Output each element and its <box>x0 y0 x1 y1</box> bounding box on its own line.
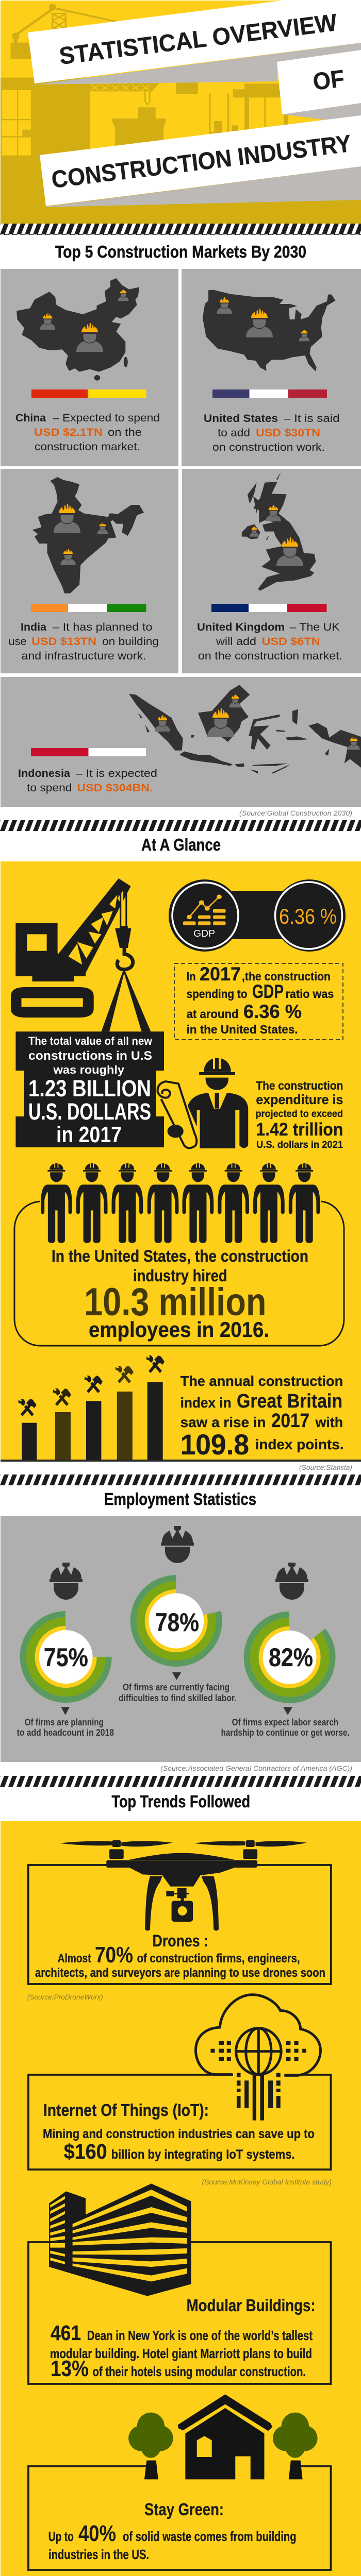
text: modular buildings <box>50 2296 316 2381</box>
text: china: USD $2.1TN <box>34 427 103 438</box>
text: employees hired: In the United States, the construction <box>52 1247 308 1265</box>
text: stay green <box>48 2500 297 2562</box>
panel: india <box>1 469 178 673</box>
icons: row of workers <box>41 1163 320 1243</box>
construction skyline <box>1 4 361 224</box>
text: india: India <box>21 621 46 633</box>
icon: drone <box>60 1840 307 1930</box>
text: united kingdom: United Kingdom <box>197 621 285 633</box>
icon: gdp chart <box>183 894 226 925</box>
donut: 82 percent <box>247 1615 333 1700</box>
donut: 78 percent: 78% <box>155 1608 199 1637</box>
text: construction expenditure: U.S. dollars in 2021 <box>256 1140 343 1150</box>
icon: house with trees <box>128 2394 318 2479</box>
map: china <box>17 278 139 381</box>
text: united states: USD $30TN <box>256 427 320 439</box>
donut: 82 percent: 82% <box>269 1643 313 1672</box>
text: construction expenditure <box>256 1079 343 1150</box>
captions: difficulties to find skilled labor. <box>119 1693 236 1703</box>
text: united kingdom <box>197 621 342 662</box>
flag bar: indonesia <box>31 748 146 756</box>
icon: engineer with blueprint <box>158 1058 248 1148</box>
gdp badge: 6.36 % <box>279 904 337 928</box>
box: stay green <box>28 2466 331 2570</box>
flag bar: china <box>31 389 146 398</box>
text: stay green: industries in the US. <box>48 2547 149 2562</box>
workers on united states <box>217 297 309 341</box>
panel: united states <box>182 269 361 466</box>
text: stay green: Up to <box>48 2529 74 2544</box>
text: annual index: with <box>315 1414 343 1430</box>
text: indonesia: Indonesia <box>18 768 70 779</box>
text: annual index: The annual construction <box>180 1373 343 1389</box>
source: mckinsey: (Source:McKinsey Global Institute study) <box>202 2178 332 2186</box>
panel: top trends <box>1 1821 361 2576</box>
text: united kingdom: – The UK <box>290 621 340 633</box>
text: china: construction market. <box>35 441 140 453</box>
text: drones: of construction firms, engineers, <box>137 1952 300 1965</box>
text: modular buildings: of their hotels using modular construction. <box>93 2364 306 2379</box>
text: united kingdom: will add <box>216 636 256 648</box>
text: construction expenditure: 1.42 trillion <box>256 1120 343 1140</box>
callout: gdp ratio: 2017 <box>200 963 241 985</box>
text: internet of things: billion by integrating IoT systems. <box>111 2147 295 2162</box>
donut: 75 percent <box>23 1614 109 1700</box>
text: annual index: saw a rise in <box>180 1414 266 1430</box>
text: india: on building <box>102 636 159 648</box>
callout: gdp ratio: at around <box>187 1007 239 1021</box>
text: drones: Almost <box>58 1952 91 1965</box>
header panel <box>1 0 361 224</box>
box: internet of things <box>28 2075 331 2170</box>
panel: at a glance <box>1 861 361 1462</box>
text: employees hired: 10.3 million <box>84 1280 266 1324</box>
arrows <box>61 1672 292 1715</box>
text: china <box>15 412 160 453</box>
source: statista: (Source:Statista) <box>299 1463 352 1471</box>
callout: gdp ratio <box>174 963 343 1040</box>
donut: 75 percent: 75% <box>44 1643 88 1672</box>
sign: total value: was roughly <box>53 1063 125 1076</box>
text: construction expenditure: projected to exceed <box>256 1109 343 1120</box>
donut: 78 percent <box>134 1578 219 1664</box>
text: united states: – It is said <box>284 413 339 425</box>
text: drones: Drones : <box>153 1931 208 1950</box>
callout: gdp ratio: GDP <box>252 981 284 1002</box>
heading: at a glance: At A Glance <box>141 835 221 854</box>
text: united states: on construction work. <box>212 442 325 453</box>
captions: Of firms expect labor search <box>232 1717 338 1727</box>
sign: total value: U.S. DOLLARS <box>28 1098 151 1125</box>
text: annual index <box>180 1373 344 1461</box>
flag bar: india <box>31 604 146 612</box>
text: united kingdom: USD $6TN <box>262 636 320 648</box>
text: india <box>8 621 159 662</box>
panel: united kingdom <box>182 469 361 673</box>
callout: gdp ratio: In <box>187 970 196 983</box>
callout: gdp ratio: in the United States. <box>187 1023 298 1036</box>
title ribbon one: STATISTICAL OVERVIEW <box>58 8 339 70</box>
text: employees hired <box>52 1247 308 1342</box>
sign: total value <box>15 1031 164 1147</box>
workers on india <box>54 504 108 565</box>
text: internet of things <box>43 2100 315 2163</box>
workers on united kingdom <box>250 505 303 566</box>
sign: total value: in 2017 <box>56 1122 122 1147</box>
heading: top 5 markets: Top 5 Construction Markets By 2030 <box>55 242 306 261</box>
captions: to add headcount in 2018 <box>17 1727 114 1738</box>
title ribbon two: OF <box>311 64 346 95</box>
source: global construction: (Source:Global Construction 2030) <box>239 809 352 817</box>
hazard stripe divider <box>0 820 361 831</box>
sign: total value: 1.23 BILLION <box>28 1075 151 1101</box>
text: indonesia <box>18 768 157 794</box>
icon: helmets <box>50 1526 308 1600</box>
text: employees hired: employees in 2016. <box>89 1317 269 1342</box>
text: stay green: Stay Green: <box>144 2500 224 2519</box>
captions: Of firms are planning <box>25 1717 104 1727</box>
panel: china <box>1 269 178 466</box>
text: china: China <box>15 412 46 424</box>
text: annual index: index in <box>180 1395 232 1411</box>
gdp badge <box>169 879 346 952</box>
text: internet of things: $160 <box>64 2140 107 2163</box>
text: china: on the <box>108 427 142 438</box>
text: indonesia: to spend <box>27 782 72 794</box>
rounded callout border <box>14 1201 344 1346</box>
text: drones <box>35 1931 325 1980</box>
title ribbon two <box>277 50 361 114</box>
text: stay green: of solid waste comes from building <box>123 2529 296 2544</box>
callout: gdp ratio: 6.36 % <box>243 1001 302 1022</box>
map: united kingdom <box>242 472 316 591</box>
heading: top trends: Top Trends Followed <box>111 1792 250 1811</box>
icon: cloud and globe <box>195 1995 320 2121</box>
text: china: – Expected to spend <box>53 412 160 424</box>
box: drones <box>28 1865 331 1984</box>
captions: Of firms are currently facing <box>123 1682 229 1692</box>
text: indonesia: USD $304BN. <box>77 782 153 794</box>
source: prodroneworx: (Source:ProDroneWorx) <box>27 1993 103 2001</box>
text: modular buildings: 461 <box>51 2321 81 2345</box>
text: employees hired: industry hired <box>133 1266 227 1285</box>
text: india: USD $13TN <box>31 636 96 648</box>
gdp badge: GDP <box>193 928 215 939</box>
map: indonesia <box>129 685 361 774</box>
workers on china <box>40 290 128 352</box>
header background <box>1 1 361 224</box>
callout: gdp ratio: spending to <box>187 987 248 1001</box>
text: india: – It has planned to <box>53 621 153 633</box>
text: modular buildings: 13% <box>51 2356 89 2381</box>
heading: employment statistics: Employment Statistics <box>104 1489 256 1509</box>
box: modular buildings <box>28 2242 331 2384</box>
callout: gdp ratio: ,the construction <box>242 970 331 983</box>
text: united states <box>204 413 339 453</box>
callout: gdp ratio: ratio was <box>286 987 334 1001</box>
map: united states <box>203 290 335 371</box>
sign: total value: constructions in U.S <box>28 1049 152 1063</box>
hazard stripe divider <box>0 224 361 235</box>
text: united kingdom: on the construction market. <box>198 650 342 662</box>
text: india: use <box>8 636 27 648</box>
bar chart: construction index <box>19 1355 165 1460</box>
text: modular buildings: Modular Buildings: <box>187 2296 316 2315</box>
source: agc: (Source:Associated General Contractors of America (AGC)) <box>160 1764 352 1772</box>
hazard stripe divider <box>0 1776 361 1787</box>
flag bar: united states <box>212 389 327 398</box>
text: internet of things: Mining and construction industries can save up to <box>43 2127 315 2141</box>
text: united states: United States <box>204 413 278 425</box>
hazard stripe divider <box>0 1475 361 1485</box>
text: stay green: 40% <box>78 2521 116 2546</box>
sign: total value: The total value of all new <box>28 1035 153 1047</box>
workers on indonesia <box>155 694 360 750</box>
title shadow bands <box>35 43 361 207</box>
text: construction expenditure: expenditure is <box>256 1092 343 1107</box>
text: annual index: 2017 <box>271 1410 309 1432</box>
icon: modular building <box>49 2183 191 2296</box>
captions <box>17 1682 350 1738</box>
text: annual index: 109.8 <box>180 1428 249 1461</box>
title ribbon one <box>28 0 361 83</box>
panel: indonesia <box>1 677 361 807</box>
text: united states: to add <box>218 427 250 439</box>
text: indonesia: – It is expected <box>76 768 157 779</box>
text: drones: 70% <box>95 1942 133 1968</box>
flag bar: united kingdom <box>211 604 327 612</box>
text: annual index: Great Britain <box>237 1391 342 1412</box>
text: internet of things: Internet Of Things (IoT): <box>43 2100 209 2120</box>
text: india: and infrastructure work. <box>22 650 146 662</box>
text: annual index: index points. <box>255 1436 344 1452</box>
text: construction expenditure: The construction <box>256 1079 343 1092</box>
map: india <box>32 477 144 594</box>
icon: crane <box>11 878 151 1031</box>
panel: employment statistics <box>1 1516 361 1762</box>
